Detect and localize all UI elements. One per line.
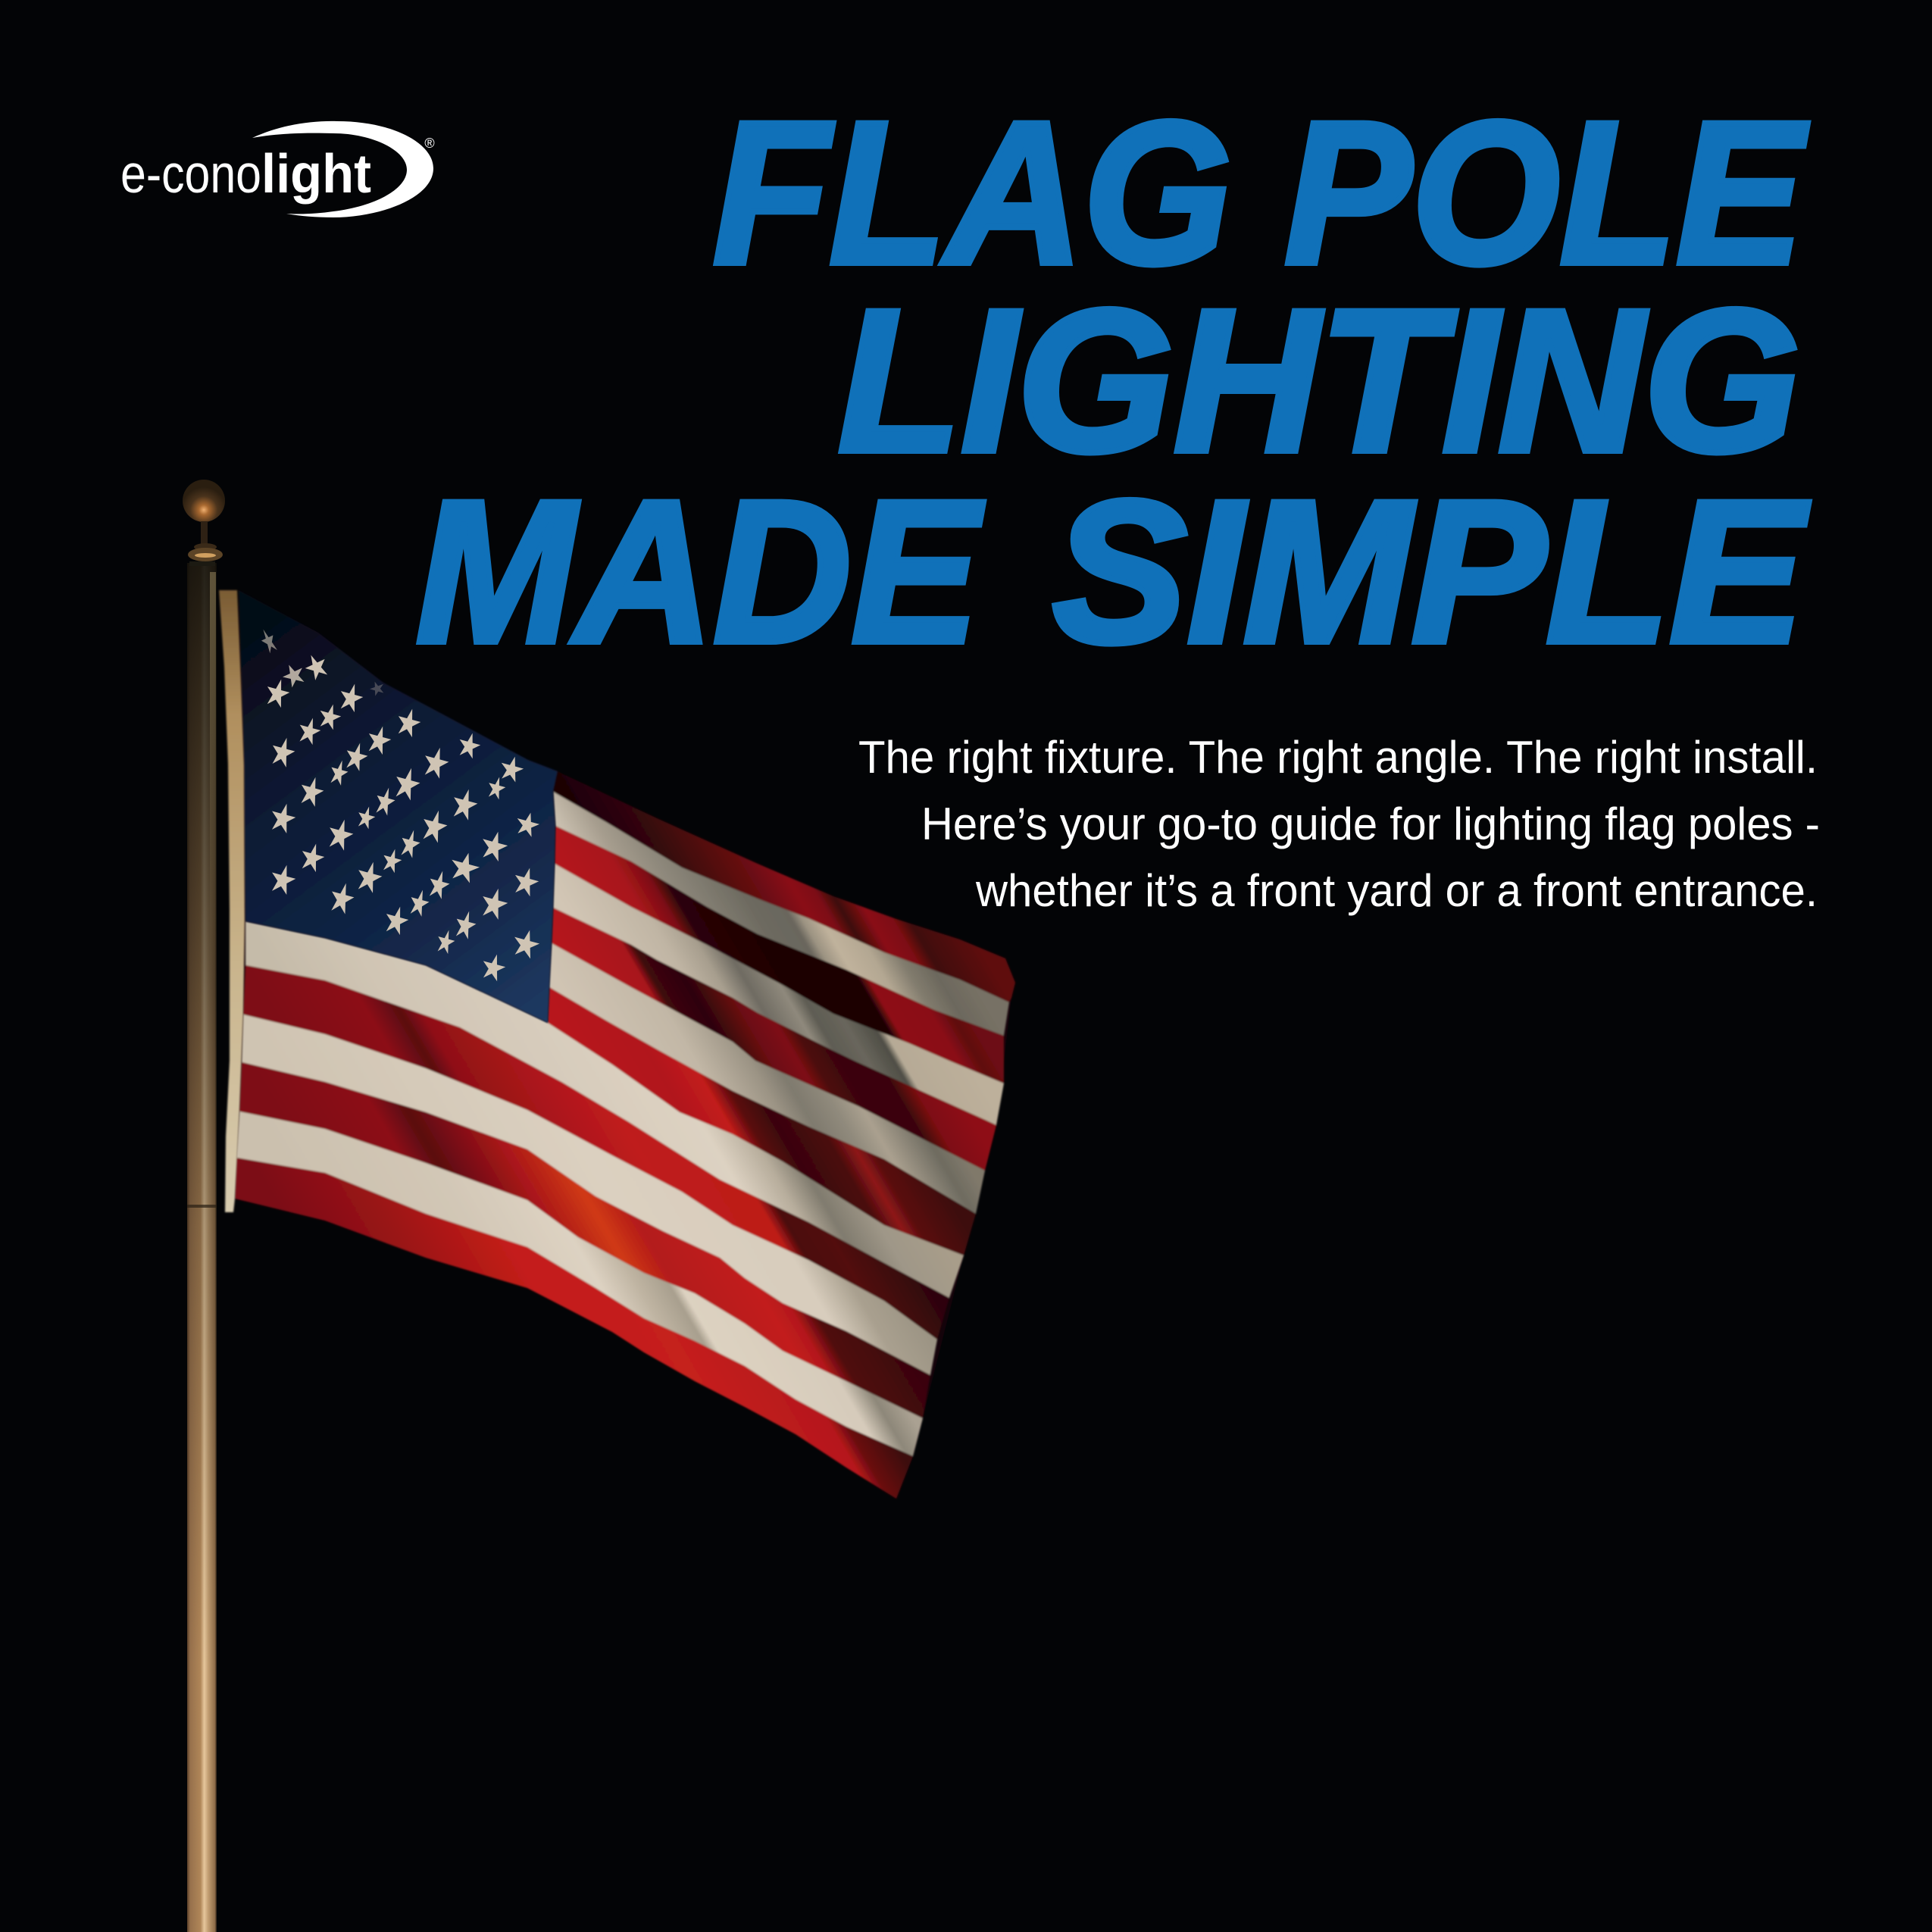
finial collar <box>188 521 223 566</box>
title <box>416 79 1812 685</box>
intro text <box>858 732 1820 916</box>
flag base shape <box>235 590 1015 1499</box>
pole shaft <box>187 563 217 1932</box>
logo wordmark bold part: light <box>261 144 371 205</box>
logo: e-conolight <box>120 121 435 217</box>
flag heading sleeve <box>219 590 245 1212</box>
title word: simple: SIMPLE <box>1052 458 1812 685</box>
logo wordmark: e-cono <box>120 145 261 205</box>
stripes <box>235 771 1015 1499</box>
title word: made: MADE <box>416 458 986 685</box>
title line 3 <box>416 458 1812 685</box>
title line 1: FLAG POLE <box>713 79 1810 306</box>
intro line 3: whether it’s a front yard or a front entrance. <box>975 865 1818 916</box>
title line 2: LIGHTING <box>838 267 1800 494</box>
registered mark: ® <box>424 136 435 151</box>
canton <box>239 590 558 1023</box>
intro line 1: The right fixture. The right angle. The right install. <box>858 732 1818 783</box>
stars <box>258 627 542 983</box>
intro line 2: Here’s your go-to guide for lighting flag poles - <box>921 799 1820 849</box>
logo swoosh <box>252 121 433 217</box>
american flag <box>219 590 1015 1499</box>
flag pole <box>183 480 225 1932</box>
finial ball <box>183 480 225 522</box>
